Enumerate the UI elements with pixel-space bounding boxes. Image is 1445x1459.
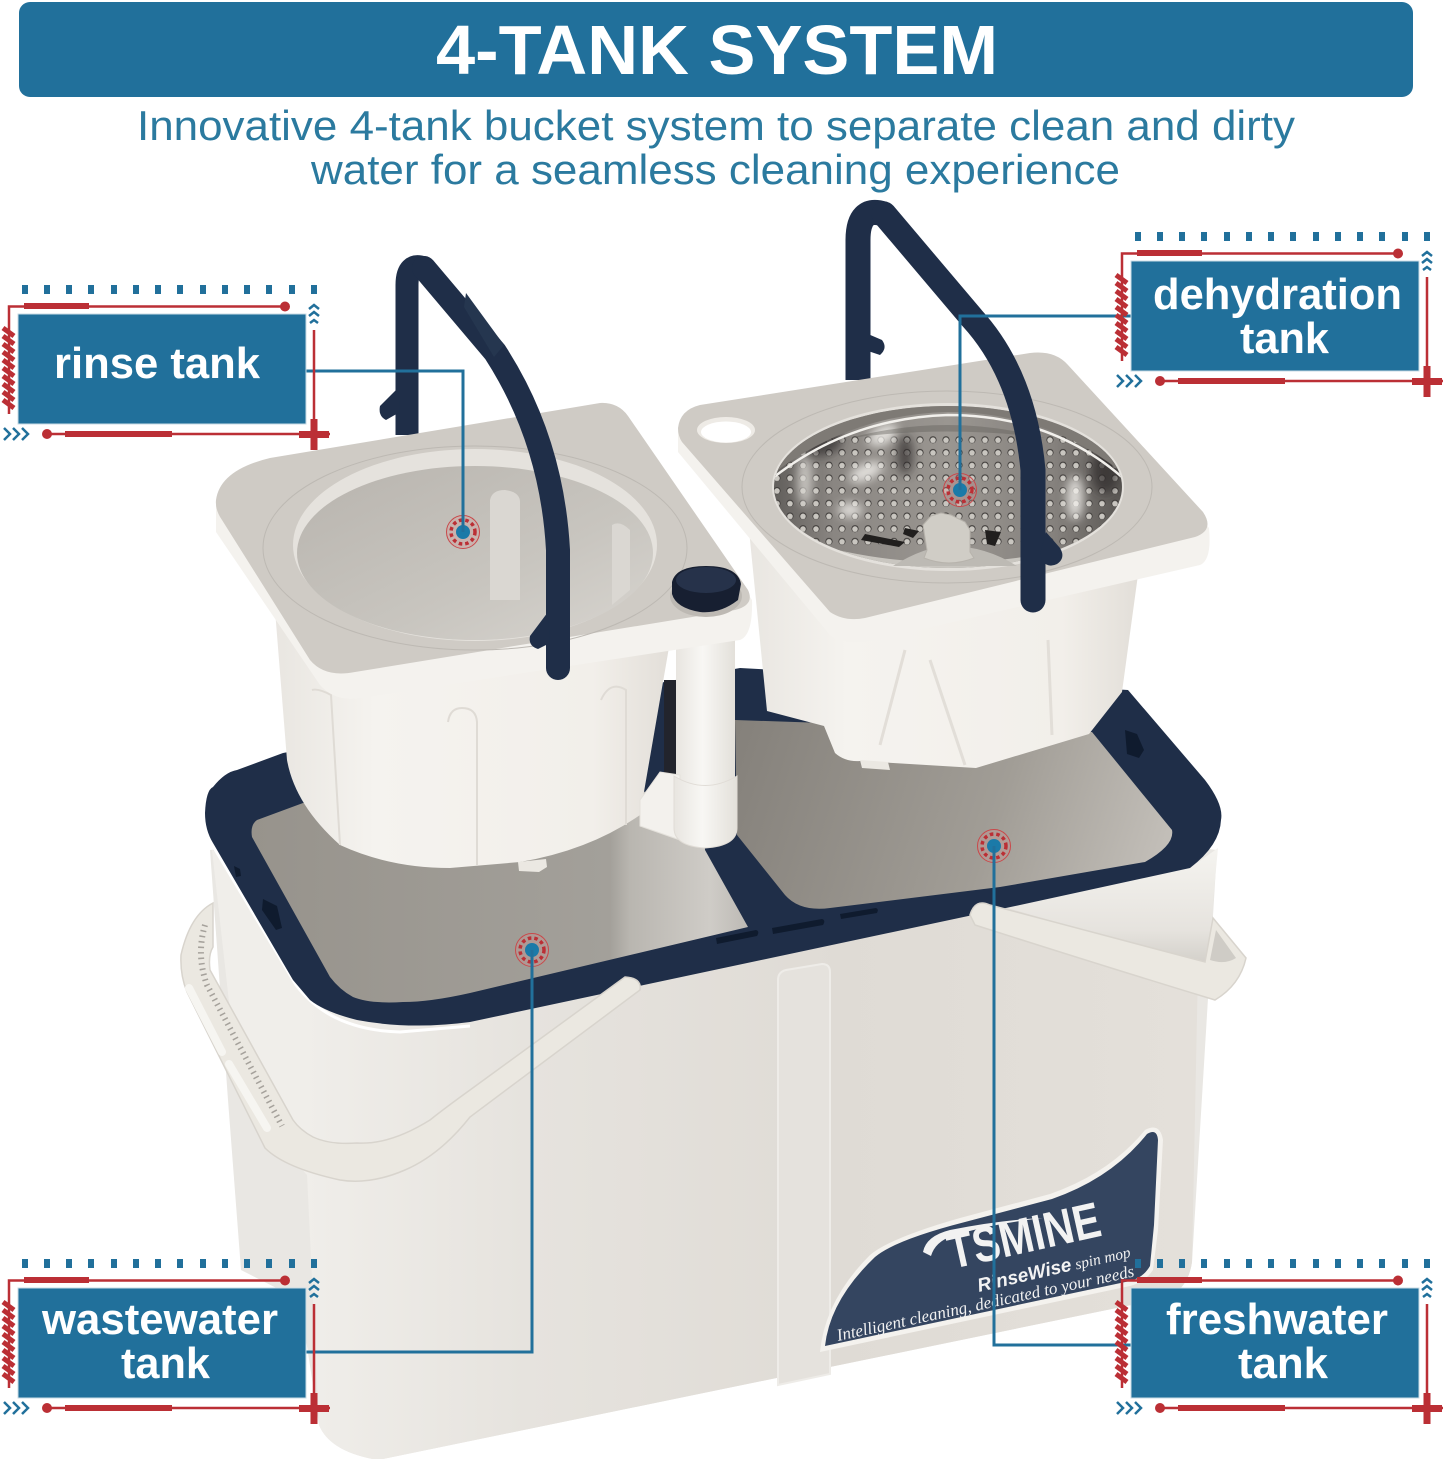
label: dehydration tank: dehydration xyxy=(1153,270,1402,319)
drain pipe xyxy=(640,640,737,848)
label: dehydration tank xyxy=(1116,232,1443,397)
label: freshwater tank: tank xyxy=(1238,1339,1329,1388)
label: wastewater tank: tank xyxy=(121,1339,211,1388)
label: freshwater tank: freshwater xyxy=(1166,1295,1388,1344)
rim clips and divider slots xyxy=(234,730,1144,944)
navy bucket rim xyxy=(205,668,1221,1026)
product: mop bucket with four tanks xyxy=(181,212,1246,1459)
freshwater opening floor xyxy=(735,720,1172,909)
front of handle xyxy=(884,214,1033,600)
tank wall xyxy=(275,610,672,868)
TSMINE brand badge: RinseWisespin mop xyxy=(975,1241,1133,1297)
label: wastewater tank: wastewater xyxy=(41,1295,278,1344)
water knob xyxy=(670,566,742,617)
steel basket xyxy=(770,400,1126,580)
back of handle xyxy=(407,267,424,435)
bucket carry handle: right xyxy=(970,903,1246,1000)
leader line and target: rinse tank xyxy=(306,371,480,548)
plate edge xyxy=(678,360,1210,642)
back of handle xyxy=(858,212,884,380)
dehydration tank xyxy=(678,212,1210,770)
bowl xyxy=(293,449,657,641)
subtitle: Innovative 4-tank bucket system to separate clean and dirty xyxy=(137,102,1295,149)
label: freshwater tank xyxy=(1116,1259,1443,1424)
leader line and target: dehydration tank xyxy=(944,316,1131,506)
finger hole xyxy=(697,417,755,443)
label: rinse tank: rinse tank xyxy=(54,339,261,388)
subtitle: water for a seamless cleaning experience xyxy=(310,146,1120,193)
dark gap behind drain pipe xyxy=(664,680,678,775)
TSMINE brand badge: TSMINE xyxy=(942,1192,1106,1280)
title banner xyxy=(19,2,1413,97)
label: dehydration tank: tank xyxy=(1240,314,1330,363)
TSMINE brand badge: Intelligent cleaning, dedicated to your needs xyxy=(834,1262,1136,1345)
subtitle xyxy=(137,102,1295,193)
plate edge xyxy=(216,415,752,699)
TSMINE brand badge xyxy=(820,1128,1163,1352)
bucket body xyxy=(210,800,1218,1459)
label: rinse tank xyxy=(3,285,330,450)
bucket carry handle: left xyxy=(181,903,640,1181)
tank wall xyxy=(749,530,1140,768)
leader line and target: freshwater tank xyxy=(978,830,1131,1345)
rinse tank xyxy=(216,267,752,872)
title banner: 4-TANK SYSTEM xyxy=(436,11,998,89)
front of handle xyxy=(424,268,558,668)
plate top xyxy=(678,352,1208,619)
plate top xyxy=(216,403,750,674)
label: wastewater tank xyxy=(3,1259,330,1424)
wastewater opening floor xyxy=(252,790,748,1002)
basket hub xyxy=(893,546,1017,566)
leader line and target: wastewater tank xyxy=(306,934,548,1352)
